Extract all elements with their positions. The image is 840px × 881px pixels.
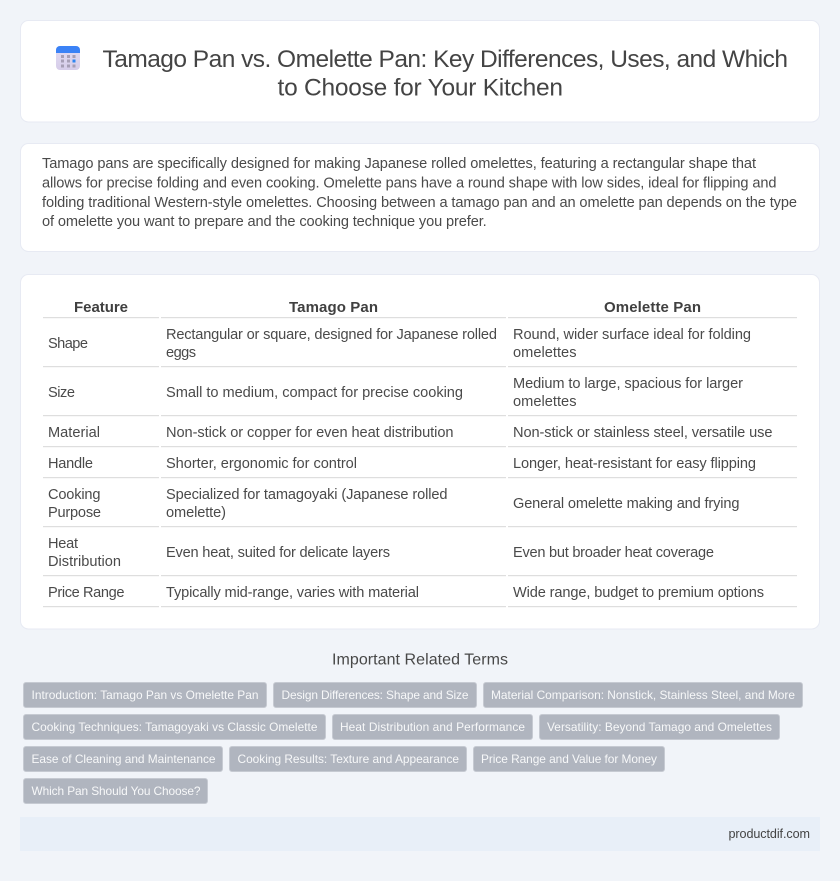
table row: material: Non-stick or stainless steel, versatile use <box>513 425 772 441</box>
title: Tamago Pan vs. Omelette Pan: Key Differences, Uses, and Which <box>102 46 788 73</box>
tag <box>24 746 222 772</box>
table row: shape: Round, wider surface ideal for folding <box>513 327 751 343</box>
table row: heat distribution: Distribution <box>48 554 121 570</box>
table header <box>43 299 797 318</box>
table row: price range <box>43 585 797 607</box>
icon: calendar <box>56 46 80 70</box>
text block: introduction paragraph: allows for precise folding and even cooking. Omelette pans have a round shape with low sides, ideal for flipping and <box>42 176 776 192</box>
heading: important related terms: Important Related Terms <box>332 652 508 668</box>
tag <box>484 682 802 708</box>
tag: Heat Distribution and Performance <box>340 720 525 734</box>
table row: material: Material <box>48 425 100 441</box>
table row: cooking purpose: General omelette making and frying <box>513 496 740 512</box>
tag: Introduction: Tamago Pan vs Omelette Pan <box>32 688 258 702</box>
table row: shape: Rectangular or square, designed for Japanese rolled <box>166 327 497 343</box>
table row: handle: Shorter, ergonomic for control <box>166 456 357 472</box>
tag: Material Comparison: Nonstick, Stainless Steel, and More <box>491 688 795 702</box>
table row: handle: Handle <box>48 456 93 472</box>
table row: size: omelettes <box>513 394 576 410</box>
text block: introduction paragraph: folding traditional Western-style omelettes. Choosing between a tamago pan and an omelette pan depends on the type <box>42 195 797 211</box>
table row: size: Small to medium, compact for precise cooking <box>166 385 463 401</box>
tag <box>24 682 266 708</box>
table row: material: Non-stick or copper for even heat distribution <box>166 425 454 441</box>
tag <box>274 682 476 708</box>
tag <box>24 778 208 804</box>
table row: price range: Typically mid-range, varies with material <box>166 585 419 601</box>
table row: handle <box>43 456 797 478</box>
tag <box>474 746 664 772</box>
tag: Cooking Results: Texture and Appearance <box>238 752 459 766</box>
title <box>102 46 788 102</box>
table row: shape: Shape <box>48 336 88 352</box>
table row: shape: eggs <box>166 345 196 361</box>
panel: comparison table <box>20 274 820 629</box>
table row: handle: Longer, heat-resistant for easy flipping <box>513 456 756 472</box>
table header: Feature <box>74 299 128 316</box>
tag: Which Pan Should You Choose? <box>32 784 201 798</box>
table row: size: Medium to large, spacious for larger <box>513 376 743 392</box>
table header: Tamago Pan <box>289 299 378 316</box>
table row: cooking purpose: Cooking <box>48 487 100 503</box>
table row: heat distribution: Heat <box>48 536 78 552</box>
table row: shape: omelettes <box>513 345 576 361</box>
panel: related term tags <box>24 682 802 804</box>
tag <box>24 714 326 740</box>
table row: size: Size <box>48 385 75 401</box>
table row: cooking purpose <box>43 487 797 527</box>
tag: Design Differences: Shape and Size <box>282 688 469 702</box>
table header: Omelette Pan <box>604 299 701 316</box>
table row: cooking purpose: omelette) <box>166 505 226 521</box>
tag <box>332 714 532 740</box>
text block: introduction paragraph: Tamago pans are specifically designed for making Japanese rolled omelettes, featuring a rectangular shape that <box>42 156 756 172</box>
table row: cooking purpose: Specialized for tamagoyaki (Japanese rolled <box>166 487 448 503</box>
table row: shape <box>43 327 797 367</box>
tag: Ease of Cleaning and Maintenance <box>32 752 216 766</box>
tag: Price Range and Value for Money <box>481 752 657 766</box>
table row: heat distribution: Even heat, suited for delicate layers <box>166 545 390 561</box>
panel: introduction <box>20 144 820 252</box>
table row: heat distribution <box>43 536 797 576</box>
panel: title header <box>20 20 820 122</box>
text block: introduction paragraph <box>42 156 797 230</box>
tag <box>540 714 780 740</box>
footer: productdif.com <box>728 827 810 841</box>
tag: Cooking Techniques: Tamagoyaki vs Classic Omelette <box>32 720 318 734</box>
tag: Versatility: Beyond Tamago and Omelettes <box>547 720 772 734</box>
table row: heat distribution: Even but broader heat coverage <box>513 545 714 561</box>
table row: size <box>43 376 797 416</box>
table row: price range: Price Range <box>48 585 124 601</box>
table row: price range: Wide range, budget to premium options <box>513 585 764 601</box>
table row: cooking purpose: Purpose <box>48 505 101 521</box>
text block: introduction paragraph: of omelette you want to prepare and the cooking technique you prefer. <box>42 214 487 230</box>
title: to Choose for Your Kitchen <box>278 74 563 102</box>
table row: material <box>43 425 797 447</box>
footer <box>20 817 820 851</box>
tag <box>230 746 466 772</box>
